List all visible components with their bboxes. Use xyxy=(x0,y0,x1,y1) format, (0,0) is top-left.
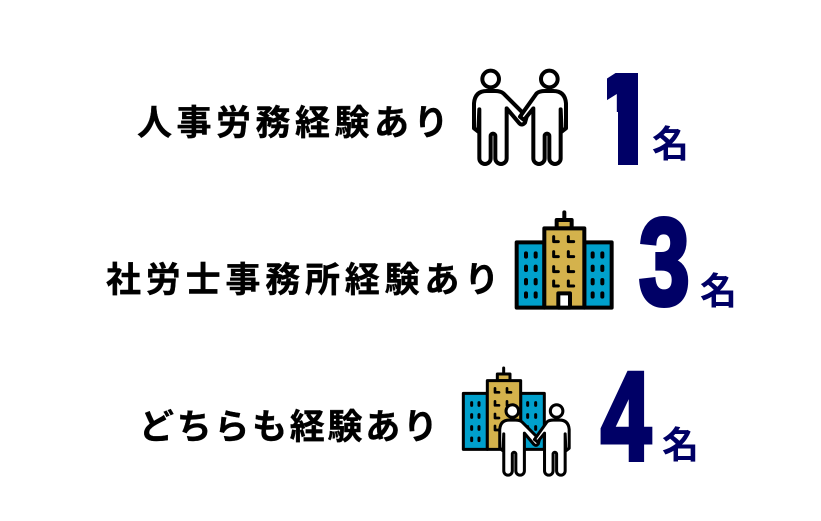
unit 名: 名 xyxy=(662,425,699,466)
icon: two people shaking hands xyxy=(474,71,566,164)
row 2 label: 社労士事務所経験あり xyxy=(106,261,504,300)
building xyxy=(463,368,544,449)
icon: office building xyxy=(517,212,612,308)
number 1: 1 xyxy=(589,45,662,192)
number 4: 4 xyxy=(601,347,651,487)
icon: building with two people xyxy=(463,368,569,475)
people xyxy=(500,405,569,475)
unit 名: 名 xyxy=(700,271,737,312)
number 3: 3 xyxy=(639,193,690,330)
row 3 label: どちらも経験あり xyxy=(139,408,441,447)
row 1 label: 人事労務経験あり xyxy=(137,104,453,143)
unit 名: 名 xyxy=(652,124,689,165)
